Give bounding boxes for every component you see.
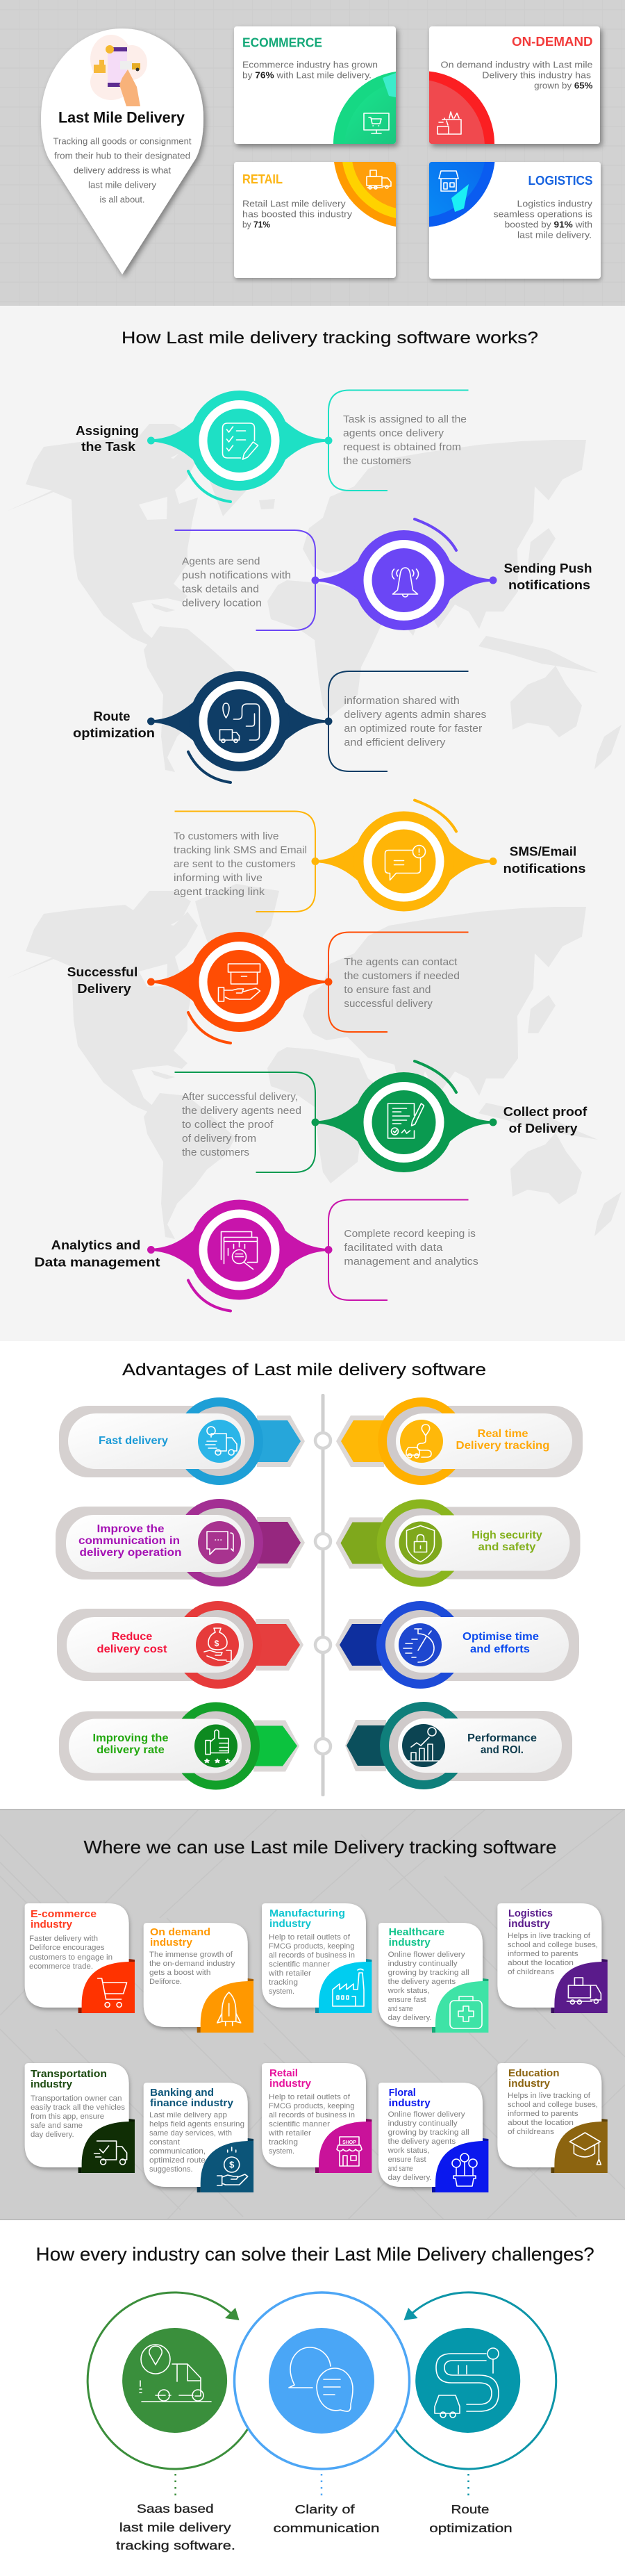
icon: coin over hand — [217, 2147, 248, 2185]
advantage: performance and roi — [345, 1702, 572, 1789]
pin description — [53, 136, 192, 204]
industry card: retail: scientific manner — [269, 2120, 330, 2128]
industry card: floral: Online flower delivery — [388, 2110, 465, 2119]
advantage: improving the delivery rate: Improving the — [93, 1732, 169, 1744]
pin description: is all about. — [100, 195, 144, 204]
industry card: healthcare: and same — [388, 2005, 413, 2013]
panel: market overview background — [0, 0, 625, 306]
industry card: healthcare: industry — [389, 1937, 431, 1949]
industry card: healthcare: Online flower delivery — [388, 1951, 465, 1959]
step: sending push notifications: Agents are send — [182, 556, 260, 567]
industry card: floral: ensure fast — [388, 2156, 426, 2164]
industry card: retail: system. — [269, 2147, 294, 2156]
advantage: reduce delivery cost — [57, 1601, 303, 1689]
industry card: banking and finance: constant — [149, 2138, 180, 2147]
industry card: retail: FMCG products, keeping — [269, 2102, 354, 2110]
icon: flower pot — [452, 2153, 477, 2186]
panel: on-demand card: Delivery this industry has — [482, 69, 592, 81]
icon: shop — [337, 2137, 362, 2166]
step: collect proof of delivery: Collect proof — [503, 1105, 588, 1119]
step: successful delivery: The agents can contact — [344, 957, 457, 968]
heading: industries: Where we can use Last mile Delivery tracking software — [83, 1837, 557, 1857]
advantage: high security and safety: High security — [472, 1529, 542, 1541]
step: collect proof of delivery: to collect the proof — [182, 1119, 274, 1131]
industry card: logistics: of childreans — [508, 1968, 555, 1976]
advantage: improve communication: communication in — [78, 1535, 180, 1547]
step: sending push notifications: push notifications with — [182, 570, 291, 581]
industry card: e-commerce: E-commerce — [31, 1908, 97, 1920]
panel: solutions background — [0, 2220, 625, 2576]
step: route optimization: Route — [93, 709, 131, 723]
industry card: on demand — [144, 1923, 253, 2033]
icon: bell — [392, 568, 418, 597]
step: collect proof of delivery — [175, 1061, 588, 1172]
icon: dashboard with magnifier — [221, 1231, 257, 1269]
label — [429, 2502, 512, 2535]
industry card: healthcare: day delivery. — [388, 2014, 432, 2022]
industry card: e-commerce: ecommerce trade. — [29, 1962, 93, 1971]
icon: chat bubbles — [269, 2328, 374, 2434]
panel: last mile delivery map pin — [41, 28, 203, 274]
industry card: banking and finance — [144, 2083, 253, 2192]
centre ring — [235, 2292, 410, 2469]
panel: how it works background — [0, 306, 625, 1341]
icon: car on route — [406, 1425, 431, 1458]
pin description: Tracking all goods or consignment — [53, 136, 192, 146]
industry card: e-commerce: Faster delivery with — [29, 1935, 98, 1943]
icon: chat messages — [207, 1532, 233, 1554]
label: Route — [451, 2502, 489, 2516]
industry card: education — [497, 2063, 608, 2173]
connector dots — [321, 2474, 322, 2500]
icon: phone tracking illustration — [90, 35, 147, 106]
industry card: on demand: Deliforce. — [149, 1978, 182, 1986]
panel: on-demand card: grown by 65% — [534, 81, 593, 90]
arrow: green ring into centre — [88, 2292, 248, 2469]
step: assigning the task: Task is assigned to all the — [343, 414, 467, 425]
icon: fast truck — [206, 1427, 237, 1455]
icon: route and truck — [219, 703, 260, 742]
icon: winding road — [415, 2328, 520, 2433]
step: collect proof of delivery: of delivery from — [182, 1133, 256, 1145]
industry card: logistics: school and college buses, — [508, 1941, 598, 1949]
label: communication — [274, 2521, 379, 2535]
industry card: education: about the location — [508, 2119, 574, 2127]
industry card: floral: and same — [388, 2165, 413, 2173]
panel: on-demand card: On demand industry with Last mile — [440, 60, 593, 69]
industry card: retail: tracking — [269, 2138, 298, 2147]
heading: advantages: Advantages of Last mile delivery software — [122, 1361, 486, 1379]
label: Clarity of — [294, 2502, 355, 2516]
industry card: e-commerce — [25, 1903, 135, 2013]
industry card: banking and finance: Last mile delivery app — [149, 2111, 227, 2119]
icon: rocket with dollar — [217, 1992, 241, 2026]
icon: shopping cart — [98, 1978, 127, 2007]
icon: thumbs up with stars — [205, 1730, 230, 1762]
industry card: on demand: The immense growth of — [149, 1951, 233, 1959]
advantage: real time delivery tracking: Delivery tracking — [456, 1440, 550, 1452]
industry card: retail: with retailer — [268, 2129, 311, 2138]
step: assigning the task: the customers — [343, 456, 411, 467]
industry card: floral — [378, 2083, 488, 2192]
industry card: education: school and college buses, — [508, 2101, 598, 2109]
icon: money bag on hand — [204, 1628, 231, 1662]
panel: logistics card — [428, 162, 603, 283]
industry card: education: Education — [508, 2067, 560, 2079]
industry card: on demand: gets a boost with — [149, 1969, 210, 1977]
industry card: manufacturing: Manufacturing — [269, 1908, 345, 1919]
timeline spine — [315, 1394, 331, 1796]
arrow: teal ring into centre — [395, 2292, 556, 2469]
advantage: optimise time and efforts: Optimise time — [462, 1631, 539, 1643]
industry card: education: industry — [508, 2078, 551, 2090]
industry card: floral: work status, — [388, 2147, 430, 2155]
icon: shopping monitor — [364, 113, 389, 133]
step: analytics and data management: Complete record keeping is — [344, 1229, 476, 1240]
industry card: retail: all records of business in — [269, 2111, 355, 2119]
step: analytics and data management: Data management — [35, 1255, 160, 1269]
step: collect proof of delivery: of Delivery — [508, 1122, 578, 1135]
label: tracking software. — [116, 2538, 235, 2552]
step: sms and email notifications — [174, 801, 586, 912]
industry card: logistics: informed to parents — [508, 1950, 578, 1958]
industry card: transportation: Transportation — [31, 2068, 107, 2080]
step: route optimization: optimization — [73, 726, 155, 740]
panel: industries background — [0, 1800, 625, 2220]
icon: delivery truck with boxes — [367, 170, 391, 189]
industry card: healthcare: growing by tracking all — [388, 1969, 469, 1977]
icon: medical case — [450, 1996, 482, 2028]
advantage: performance and roi: Performance — [467, 1732, 537, 1744]
step: sms and email notifications: notifications — [503, 862, 586, 876]
industry card: transportation — [25, 2063, 135, 2173]
industry card: on demand: industry — [150, 1937, 193, 1949]
industry card: education: Helps in live tracking of — [508, 2092, 591, 2100]
industry card: manufacturing: industry — [269, 1918, 312, 1930]
step: assigning the task: agents once delivery — [343, 428, 444, 439]
step: route optimization: delivery agents admin shares — [344, 709, 486, 721]
icon: storefront — [439, 171, 458, 191]
panel: ecommerce card — [233, 26, 401, 150]
panel: retail card — [233, 162, 399, 282]
label: Saas based — [137, 2502, 214, 2516]
industry card: healthcare: Healthcare — [389, 1926, 444, 1938]
step: collect proof of delivery: After successful delivery, — [182, 1092, 298, 1103]
panel: retail card: has boosted this industry — [242, 208, 353, 220]
step: collect proof of delivery: the customers — [182, 1147, 249, 1158]
advantage: performance and roi: and ROI. — [481, 1744, 524, 1756]
solution: saas based tracking software — [88, 2292, 248, 2552]
step: successful delivery: successful delivery — [344, 999, 433, 1010]
step: sending push notifications: notifications — [508, 578, 590, 592]
step: analytics and data management: Analytics and — [51, 1238, 140, 1252]
step: sms and email notifications: informing with live — [174, 873, 262, 884]
pin shape — [41, 28, 203, 274]
panel: logistics card: last mile delivery. — [517, 229, 592, 240]
label: optimization — [429, 2521, 512, 2535]
industry card: education: informed to parents — [508, 2110, 578, 2118]
step: route optimization: and efficient delivery — [344, 737, 446, 748]
industry card: floral: day delivery. — [388, 2174, 432, 2182]
advantage: optimise time and efforts — [335, 1601, 579, 1689]
industry card: logistics: Logistics — [508, 1908, 553, 1919]
connector dots — [174, 2474, 176, 2500]
icon: growth chart — [408, 1728, 439, 1761]
step: analytics and data management: facilitated with data — [344, 1242, 443, 1254]
step: assigning the task: Assigning — [76, 424, 139, 438]
label — [116, 2502, 235, 2552]
step: route optimization: information shared with — [344, 696, 460, 707]
industry card: floral: industry continually — [388, 2119, 458, 2128]
icon: message bubble with alert — [385, 845, 425, 880]
industry card: manufacturing: scientific manner — [269, 1960, 330, 1969]
advantage: fast delivery — [59, 1397, 305, 1485]
industry card: banking and finance: communication, — [149, 2147, 206, 2156]
icon: graduation cap — [569, 2133, 601, 2165]
industry card: logistics: industry — [508, 1918, 551, 1930]
connector dots — [467, 2474, 469, 2500]
industry card: manufacturing — [262, 1903, 372, 2013]
label — [274, 2502, 379, 2535]
pin description: from their hub to their designated — [54, 150, 190, 161]
industry card: transportation: industry — [31, 2078, 73, 2090]
advantage: reduce delivery cost: delivery cost — [97, 1643, 167, 1655]
step: sending push notifications — [175, 519, 592, 630]
industry card: healthcare: work status, — [388, 1987, 430, 1995]
step: sms and email notifications: agent tracking link — [174, 887, 265, 898]
pin description: delivery address is what — [74, 165, 171, 175]
panel: on-demand card: ON-DEMAND — [512, 35, 593, 49]
step: sms and email notifications: To customers with live — [174, 831, 279, 842]
advantage: fast delivery: Fast delivery — [99, 1435, 168, 1447]
advantage: improve communication: delivery operation — [79, 1547, 182, 1559]
solution: clarity of communication — [235, 2292, 410, 2535]
industry card: banking and finance: optimized route — [149, 2156, 206, 2165]
industry card: logistics — [497, 1903, 608, 2013]
panel: ecommerce card: by 76% with Last mile delivery. — [242, 69, 372, 81]
industry card: education: of childreans — [508, 2128, 555, 2136]
step: successful delivery: Successful — [67, 965, 138, 979]
advantage: high security and safety: and safety — [478, 1541, 536, 1553]
industry card: transportation: safe and same — [31, 2122, 83, 2130]
industry card: retail — [262, 2063, 372, 2173]
advantage: reduce delivery cost: Reduce — [112, 1631, 152, 1643]
industry card: on demand: the on-demand industry — [149, 1960, 235, 1968]
icon: cargo truck — [567, 1978, 601, 2004]
industry card: healthcare: ensure fast — [388, 1996, 426, 2004]
industry card: e-commerce: industry — [31, 1919, 73, 1930]
panel: logistics card: boosted by 91% with — [505, 220, 592, 229]
step: collect proof of delivery: the delivery agents need — [182, 1106, 301, 1117]
industry card: retail: Help to retail outlets of — [269, 2093, 351, 2101]
industry card: on demand: On demand — [150, 1926, 210, 1938]
industry card: manufacturing: tracking — [269, 1978, 298, 1987]
advantage: improve communication — [56, 1499, 305, 1586]
pin heading: Last Mile Delivery — [58, 108, 185, 126]
step: successful delivery: to ensure fast and — [344, 985, 431, 996]
industry card: floral: growing by tracking all — [388, 2128, 469, 2137]
panel: logistics card: seamless operations is — [494, 208, 593, 220]
industry card: transportation: Transportation owner can — [31, 2094, 122, 2103]
industry card: retail: industry — [269, 2078, 312, 2090]
industry card: healthcare: industry continually — [388, 1960, 458, 1968]
industry card: manufacturing: with retailer — [268, 1969, 311, 1978]
icon: shield with lock — [407, 1526, 435, 1562]
panel: retail card: by 71% — [242, 220, 270, 229]
icon: truck and location pin — [122, 2328, 227, 2433]
industry card: floral: Floral — [389, 2087, 416, 2099]
industry card: healthcare: the delivery agents — [388, 1978, 456, 1986]
industry card: manufacturing: FMCG products, keeping — [269, 1942, 354, 1951]
industry card: banking and finance: helps field agents ensuring — [149, 2120, 244, 2128]
industry card: transportation: easily track all the vehicles — [31, 2103, 126, 2112]
industry card: banking and finance: finance industry — [150, 2097, 234, 2109]
advantage: real time delivery tracking: Real time — [478, 1428, 528, 1440]
step: analytics and data management — [35, 1199, 478, 1311]
industry card: e-commerce: Deliforce encourages — [29, 1944, 105, 1952]
heading: how it works: How Last mile delivery tracking software works? — [122, 329, 538, 347]
industry card: banking and finance: Banking and — [150, 2087, 214, 2099]
panel: retail card: RETAIL — [242, 172, 283, 186]
industry card: healthcare — [378, 1923, 488, 2033]
heading: solutions: How every industry can solve their Last Mile Delivery challenges? — [36, 2244, 594, 2265]
panel: logistics card: LOGISTICS — [528, 174, 593, 188]
industry card: manufacturing: system. — [269, 1987, 294, 1996]
advantage: improving the delivery rate — [59, 1703, 299, 1790]
icon: truck with check — [94, 2141, 127, 2165]
step: sending push notifications: delivery location — [182, 598, 262, 609]
industry card: retail: Retail — [269, 2067, 298, 2079]
panel: advantages background — [0, 1341, 625, 1809]
industry card: e-commerce: customers to engage in — [29, 1953, 112, 1962]
step: assigning the task: request is obtained from — [343, 442, 461, 453]
step: sending push notifications: Sending Push — [504, 561, 592, 575]
step: sms and email notifications: are sent to the customers — [174, 859, 296, 870]
step: successful delivery: Delivery — [77, 982, 131, 996]
icon: factory — [333, 1969, 364, 2006]
step: sms and email notifications: SMS/Email — [510, 845, 576, 859]
panel: logistics card: Logistics industry — [517, 199, 593, 208]
step: route optimization: an optimized route for faster — [344, 723, 483, 735]
industry card: transportation: from this app, ensure — [31, 2113, 104, 2121]
advantage: improving the delivery rate: delivery rate — [97, 1744, 165, 1756]
industry card: manufacturing: all records of business in — [269, 1951, 355, 1960]
step: sms and email notifications: tracking link SMS and Email — [174, 845, 307, 856]
panel: ecommerce card: Ecommerce industry has grown — [242, 60, 378, 69]
step: successful delivery — [67, 932, 468, 1043]
industry card: banking and finance: suggestions. — [149, 2165, 193, 2174]
advantage: high security and safety — [336, 1500, 581, 1587]
advantage: improve communication: Improve the — [97, 1523, 165, 1535]
step: route optimization — [73, 671, 486, 782]
icon: stopwatch — [403, 1629, 434, 1662]
solution: route optimization — [395, 2292, 556, 2535]
step: assigning the task: the Task — [81, 440, 136, 454]
advantage: optimise time and efforts: and efforts — [470, 1643, 530, 1655]
industry card: manufacturing: Help to retail outlets of — [269, 1933, 351, 1942]
panel: ecommerce card: ECOMMERCE — [242, 36, 322, 50]
industry card: logistics: Helps in live tracking of — [508, 1932, 591, 1940]
step: assigning the task — [76, 391, 468, 502]
icon: box on open hand — [218, 964, 260, 1001]
icon: checklist with pencil — [222, 423, 258, 459]
panel: retail card: Retail Last mile delivery — [242, 199, 346, 208]
panel: on-demand card — [428, 26, 606, 150]
industry card: retail: SHOP — [342, 2140, 356, 2145]
step: successful delivery: the customers if needed — [344, 971, 460, 982]
industry card: logistics: about the location — [508, 1959, 574, 1967]
step: sending push notifications: task details and — [182, 584, 259, 595]
advantage: real time delivery tracking — [336, 1397, 583, 1485]
industry card: floral: industry — [389, 2097, 431, 2109]
pin description: last mile delivery — [88, 179, 157, 190]
advantage: reduce delivery cost: $ — [215, 1639, 219, 1648]
step: analytics and data management: management and analytics — [344, 1256, 478, 1268]
industry card: banking and finance: $ — [229, 2160, 235, 2169]
industry card: transportation: day delivery. — [31, 2131, 74, 2139]
icon: grocery bag thumbs up — [438, 112, 461, 134]
industry card: floral: the delivery agents — [388, 2138, 456, 2146]
label: last mile delivery — [119, 2520, 231, 2534]
industry card: banking and finance: same day services, with — [149, 2129, 232, 2138]
icon: signed document — [388, 1104, 424, 1138]
